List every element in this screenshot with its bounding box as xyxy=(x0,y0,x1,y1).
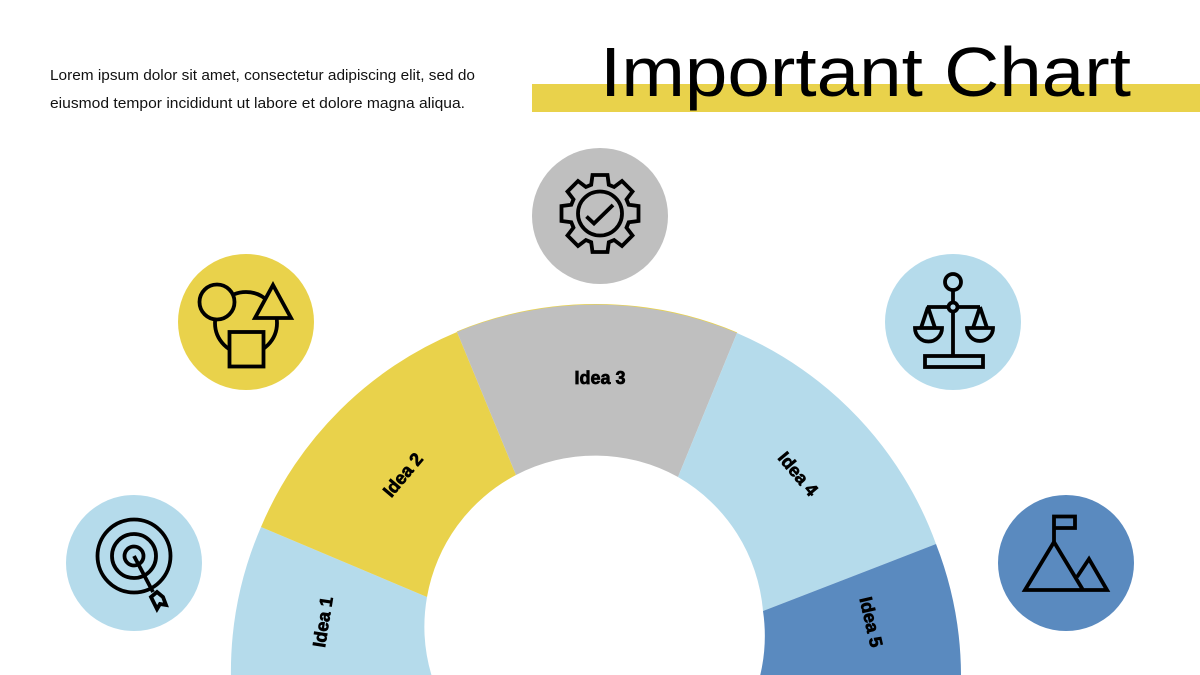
segment: Idea 4: Idea 4 xyxy=(774,448,822,500)
title with yellow highlight bar: Important Chart xyxy=(600,33,1131,111)
intro text block: eiusmod tempor incididunt ut labore et dolore magna aliqua. xyxy=(50,95,465,112)
segment: Idea 3 xyxy=(457,305,737,477)
intro text block: Lorem ipsum dolor sit amet, consectetur adipiscing elit, sed do xyxy=(50,67,475,84)
segment: Idea 1 xyxy=(231,527,433,675)
segment: Idea 1: Idea 1 xyxy=(309,595,337,649)
icon: gear with check xyxy=(532,148,668,284)
segment: Idea 2: Idea 2 xyxy=(379,449,427,501)
icon: target with arrow xyxy=(66,495,202,631)
icon: mountain with flag xyxy=(998,495,1134,631)
segment: Idea 5: Idea 5 xyxy=(856,595,886,649)
icon: balance scale xyxy=(885,254,1021,390)
semicircle chart xyxy=(231,305,961,675)
icon: shapes xyxy=(178,254,314,390)
segment: Idea 5 xyxy=(759,544,961,675)
segment: Idea 4 xyxy=(678,333,936,611)
intro text block xyxy=(50,67,475,112)
segment: Idea 3: Idea 3 xyxy=(574,368,626,388)
segment: Idea 2 xyxy=(261,332,516,597)
